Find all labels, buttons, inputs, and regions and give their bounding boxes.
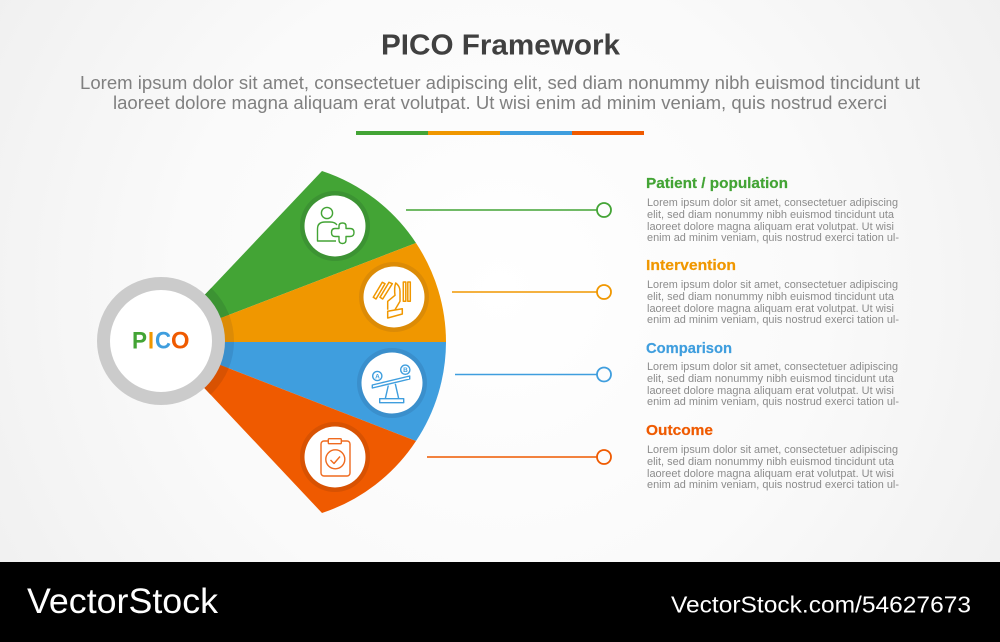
subtitle text (80, 73, 920, 113)
central PICO circle: P (132, 328, 147, 354)
connector: intervention (452, 285, 611, 299)
text block: outcome: elit, sed diam nonummy nibh euismod tincidunt uta (647, 456, 895, 468)
text block: intervention (646, 257, 899, 326)
text block: patient: enim ad minim veniam, quis nostrud exerci tation ul- (647, 232, 899, 244)
text block: outcome: Outcome (646, 422, 713, 439)
text block: patient: Patient / population (646, 175, 788, 192)
subtitle text: laoreet dolore magna aliquam erat volutpat. Ut wisi enim ad minim veniam, quis nostrud exerci (113, 93, 887, 113)
text block: patient: laoreet dolore magna aliquam erat volutpat. Ut wisi (647, 221, 894, 233)
text block: comparison: Comparison (646, 340, 732, 357)
text block: comparison: laoreet dolore magna aliquam erat volutpat. Ut wisi (647, 385, 894, 397)
footer bar (0, 562, 1000, 642)
title: PICO Framework (381, 30, 621, 62)
fan segment: patient (205, 171, 416, 318)
icon: patient with plus (300, 191, 370, 261)
connector: outcome (427, 450, 611, 464)
text block: patient (646, 175, 899, 244)
text block: comparison: Lorem ipsum dolor sit amet, consectetuer adipiscing (647, 361, 898, 373)
icon: clipboard check (300, 422, 370, 492)
text block: outcome (646, 422, 899, 491)
fan segment: intervention (220, 243, 446, 342)
central PICO circle: O (171, 328, 190, 354)
fan segment: outcome (204, 365, 416, 513)
central PICO circle: C (155, 328, 171, 354)
fan segment: comparison (220, 342, 446, 441)
footer bar: VectorStock.com/54627673 (671, 592, 971, 618)
footer bar: VectorStock (27, 582, 219, 621)
text block: outcome: Lorem ipsum dolor sit amet, consectetuer adipiscing (647, 444, 898, 456)
text block: comparison: elit, sed diam nonummy nibh euismod tincidunt uta (647, 373, 895, 385)
subtitle text: Lorem ipsum dolor sit amet, consectetuer adipiscing elit, sed diam nonummy nibh euismod tincidunt ut (80, 73, 920, 93)
icon: balance scale (357, 348, 427, 418)
text block: comparison: enim ad minim veniam, quis nostrud exerci tation ul- (647, 396, 899, 408)
central PICO circle (104, 284, 218, 398)
text block: outcome: enim ad minim veniam, quis nostrud exerci tation ul- (647, 479, 899, 491)
text block: intervention: laoreet dolore magna aliquam erat volutpat. Ut wisi (647, 303, 894, 315)
text block: intervention: elit, sed diam nonummy nibh euismod tincidunt uta (647, 291, 895, 303)
text block: comparison (646, 340, 899, 408)
connector: comparison (455, 368, 611, 382)
icon: hand with bars (359, 262, 429, 332)
text block: outcome: laoreet dolore magna aliquam erat volutpat. Ut wisi (647, 468, 894, 480)
text block: intervention: enim ad minim veniam, quis nostrud exerci tation ul- (647, 314, 899, 326)
text block: intervention: Intervention (646, 257, 736, 274)
text block: intervention: Lorem ipsum dolor sit amet, consectetuer adipiscing (647, 279, 898, 291)
text block: patient: elit, sed diam nonummy nibh euismod tincidunt uta (647, 209, 895, 221)
icon: balance scale: A (375, 373, 380, 380)
icon: balance scale: B (403, 367, 408, 374)
text block: patient: Lorem ipsum dolor sit amet, consectetuer adipiscing (647, 197, 898, 209)
connector: patient (406, 203, 611, 217)
colored divider bar (356, 131, 644, 135)
central PICO circle: I (148, 328, 154, 354)
